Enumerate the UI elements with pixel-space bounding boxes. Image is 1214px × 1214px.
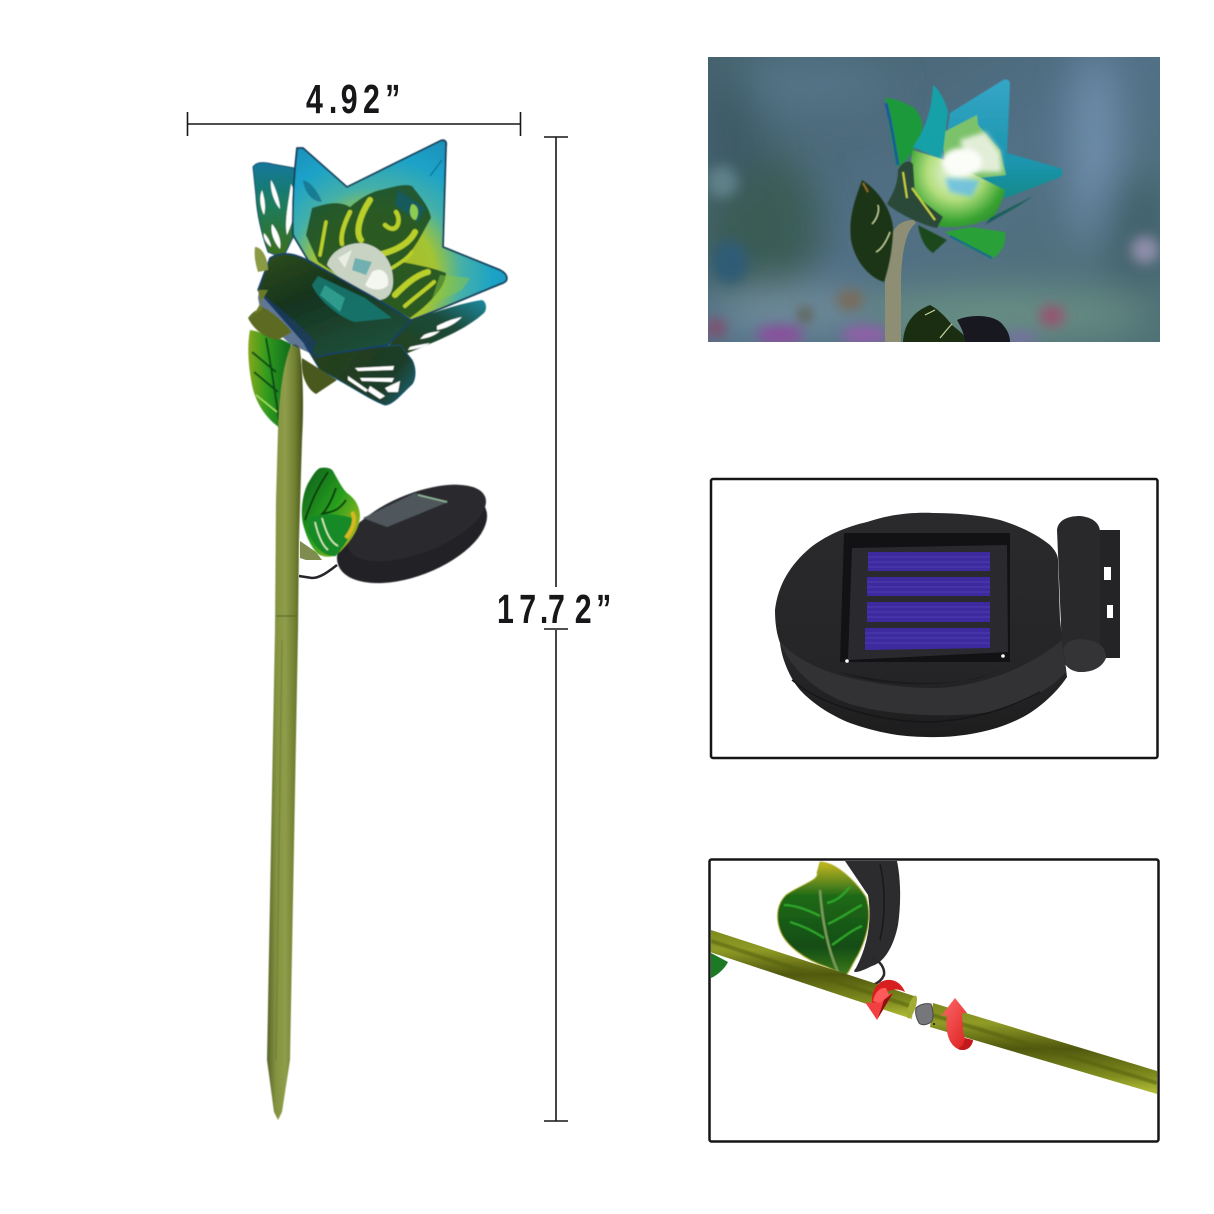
- photo: solar module: [957, 316, 1010, 342]
- main star petal: [293, 140, 507, 320]
- red rotate arrow right: [941, 998, 973, 1050]
- bracket: [300, 541, 322, 560]
- photo: back petal: [885, 98, 922, 167]
- photo: main petal: [943, 79, 1063, 198]
- back-left perforated petal: [253, 163, 302, 258]
- panel: solar panel detail: [711, 479, 1158, 758]
- red rotate arrow left: [865, 980, 905, 1020]
- product: flower stake light: [248, 140, 507, 1120]
- panel: stem assembly detail: [710, 860, 1158, 1142]
- lower rod: [930, 1003, 1157, 1094]
- threaded connector: [916, 1004, 933, 1025]
- wire: [299, 565, 337, 578]
- solar module: [324, 469, 500, 602]
- photo: inner glow: [942, 115, 1006, 180]
- small leaf at edge: [711, 953, 728, 978]
- photo: flower stem: [885, 220, 916, 342]
- stem: [267, 344, 303, 1120]
- hinge arm: [1057, 516, 1120, 672]
- frame corner dots: [845, 654, 1005, 663]
- wire loop: [874, 962, 886, 984]
- photo: bottom leaf: [903, 305, 967, 342]
- sepals: [248, 247, 337, 394]
- photo: stem leaf: [850, 180, 893, 282]
- small leaf: [302, 468, 360, 557]
- photo: bowl: [910, 150, 1005, 227]
- solar cells: [865, 552, 990, 650]
- photo: lit LED: [942, 148, 982, 176]
- leaf: [778, 862, 869, 975]
- photo: flower head: [885, 79, 1063, 258]
- lower right perforated petal: [387, 300, 486, 357]
- height dimension line: [544, 137, 568, 1121]
- width dimension line: [187, 112, 521, 136]
- leaf behind stem: [248, 330, 291, 428]
- crystal LED ball: [327, 243, 393, 300]
- disc body: [775, 513, 1067, 737]
- photo: sepal and lower petals: [887, 162, 1033, 258]
- front petal: [258, 254, 411, 357]
- upper rod: [710, 930, 914, 1019]
- panel: photo of lit flower at dusk: [700, 50, 1171, 345]
- height label: 17.72”: [497, 585, 611, 632]
- solar module side: [845, 861, 900, 972]
- solar cell frame: [840, 533, 1010, 662]
- lower perforated petal: [305, 345, 415, 405]
- width label: 4.92”: [306, 75, 400, 122]
- flower head: [248, 140, 507, 405]
